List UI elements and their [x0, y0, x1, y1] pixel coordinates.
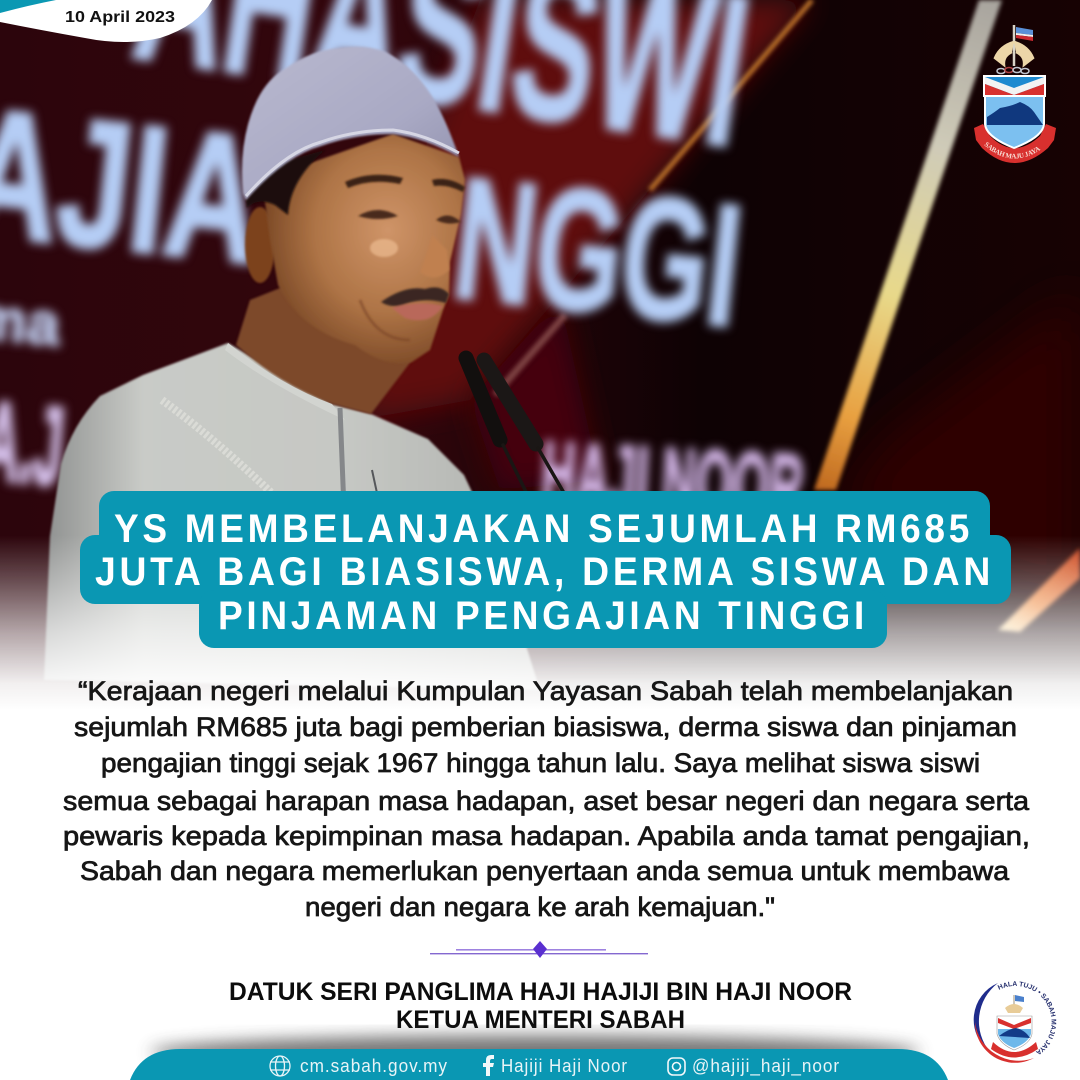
icon: facebook — [483, 1055, 494, 1076]
quotation text: pewaris kepada kepimpinan masa hadapan. Apabila anda tamat pengajian, — [63, 821, 1030, 851]
microphones — [466, 358, 568, 500]
quotation text: negeri dan negara ke arah kemajuan." — [305, 892, 775, 922]
headline text — [95, 507, 994, 638]
white fade at bottom of photo — [0, 535, 1080, 710]
facial features — [345, 175, 465, 340]
date tab: 10 April 2023 — [65, 9, 175, 26]
blurred stage lettering: NGGI — [446, 142, 750, 363]
robe — [44, 343, 540, 690]
arms clasping pole — [995, 42, 1033, 65]
background photo: stage screen — [0, 0, 1080, 720]
ear — [245, 207, 275, 283]
banner background — [80, 491, 1011, 648]
headline text: PINJAMAN PENGAJIAN TINGGI — [218, 594, 868, 638]
date tab — [0, 0, 212, 42]
instagram handle: @hajiji_haji_noor — [692, 1056, 840, 1077]
quotation text: pengajian tinggi sejak 1967 hingga tahun lalu. Saya melihat siswa siswi — [101, 748, 980, 778]
quotation text — [63, 676, 1030, 922]
attribution: DATUK SERI PANGLIMA HAJI HAJIJI BIN HAJI NOOR — [229, 978, 852, 1006]
chain — [997, 68, 1029, 74]
blurred stage lettering: HAJI NOOR — [539, 423, 806, 539]
headline text: YS MEMBELANJAKAN SEJUMLAH RM685 — [114, 507, 973, 551]
headline text: JUTA BAGI BIASISWA, DERMA SISWA DAN — [95, 550, 994, 594]
emblem: round Hala Tuju logo: HALA TUJU • SABAH MAJU JAYA — [998, 981, 1056, 1054]
footer bar — [130, 1035, 948, 1080]
face — [262, 134, 465, 363]
website: cm.sabah.gov.my — [300, 1056, 448, 1076]
motto scroll: SABAH MAJU JAYA — [984, 142, 1040, 158]
neck — [236, 280, 412, 414]
emblem: round Hala Tuju logo — [974, 981, 1056, 1063]
facebook handle: Hajiji Haji Noor — [501, 1056, 628, 1076]
hair — [246, 150, 325, 215]
icon: globe — [270, 1056, 290, 1076]
shield — [983, 75, 1046, 149]
flag and pole — [1014, 25, 1033, 66]
quotation text: semua sebagai harapan masa hadapan, aset besar negeri dan negara serta — [63, 786, 1030, 816]
quotation text: “Kerajaan negeri melalui Kumpulan Yayasan Sabah telah membelanjakan — [78, 676, 1013, 706]
cap — [242, 47, 459, 200]
quotation text: sejumlah RM685 juta bagi pemberian biasiswa, derma siswa dan pinjaman — [74, 712, 1017, 742]
headline banner — [80, 491, 1011, 648]
portrait of speaker — [44, 47, 540, 690]
icon: instagram — [668, 1058, 685, 1075]
ornamental divider — [430, 941, 648, 958]
attribution: KETUA MENTERI SABAH — [396, 1006, 685, 1034]
emblem: Sabah coat of arms — [974, 25, 1056, 163]
collar and placket — [162, 343, 385, 560]
attribution — [229, 978, 852, 1034]
blurred stage lettering — [0, 0, 806, 539]
quotation text: Sabah dan negara memerlukan penyertaan anda semua untuk membawa — [80, 856, 1010, 886]
